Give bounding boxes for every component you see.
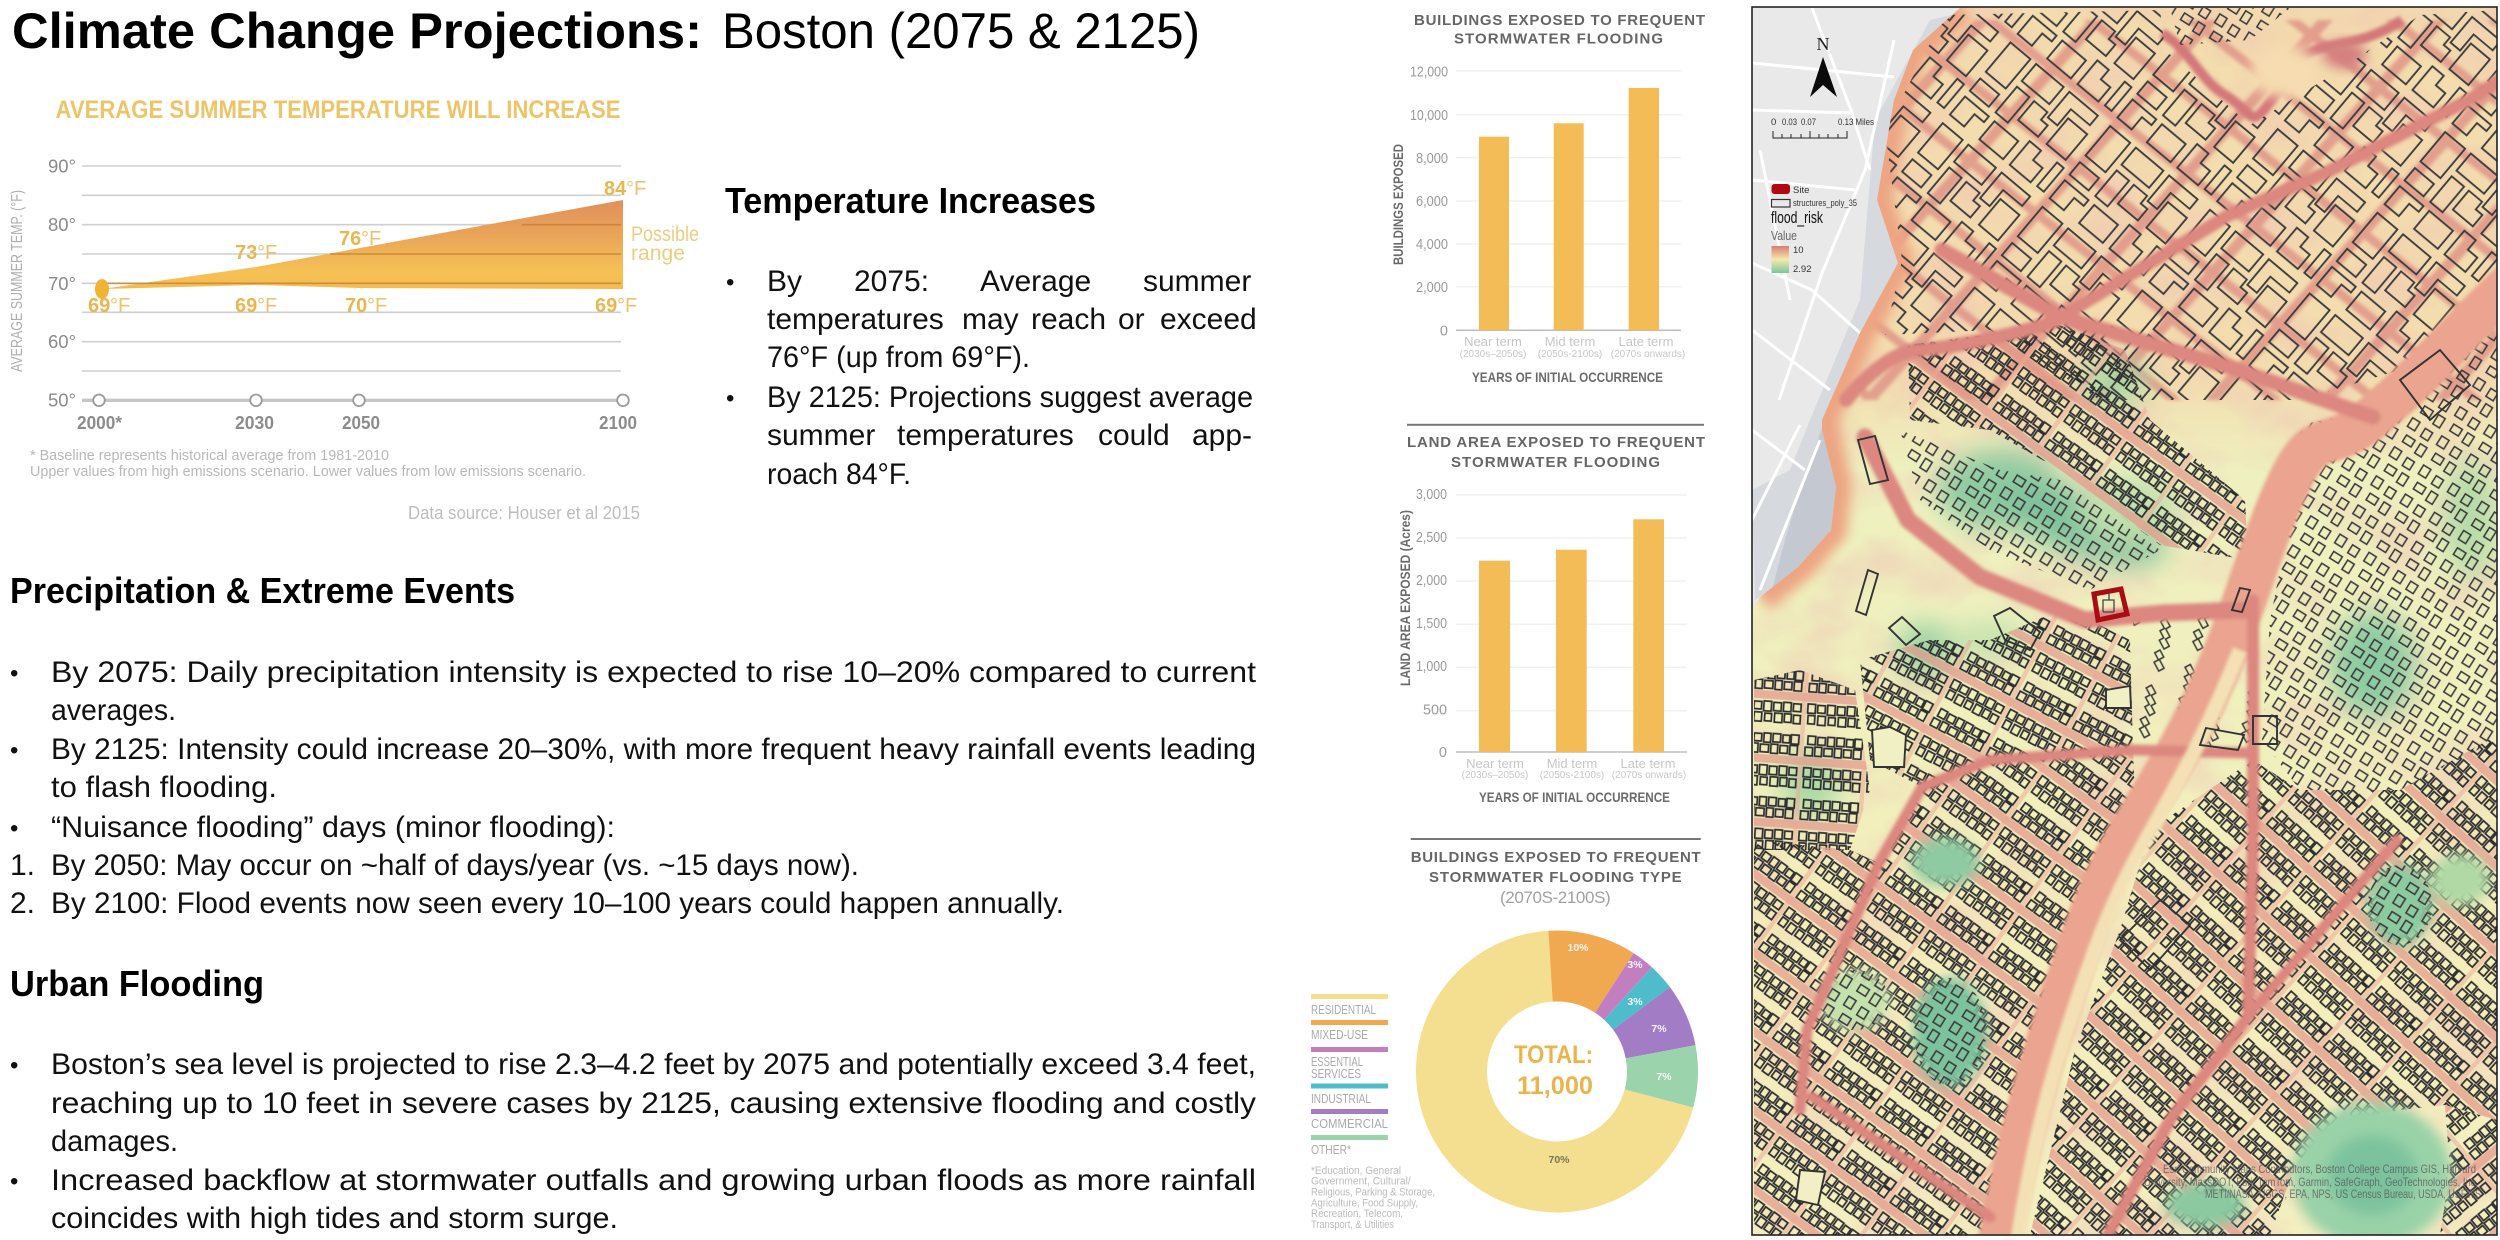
- grid: [1456, 495, 1687, 711]
- green low risk patches: [1782, 360, 2496, 815]
- legend: [1311, 994, 1388, 1157]
- chart title: BUILDINGS EXPOSED TO FREQUENT: [1414, 12, 1705, 29]
- legend footnote: Recreation, Telecom,: [1311, 1208, 1403, 1220]
- grey basemap: [1752, 8, 1960, 608]
- y axis labels: 90°: [48, 156, 76, 176]
- donut centre total: [1514, 1041, 1593, 1100]
- possible range label: range: [631, 242, 685, 265]
- y labels: 0: [1439, 745, 1447, 761]
- legend footnote: Government, Cultural/: [1311, 1176, 1412, 1188]
- bullet list: 76°F (up from 69°F).: [767, 341, 1030, 374]
- value labels: 69: [235, 295, 257, 317]
- legend footnote: [1311, 1165, 1435, 1231]
- legend: RESIDENTIAL: [1311, 1003, 1376, 1017]
- value labels: 69: [595, 295, 617, 317]
- percent labels: 70%: [1548, 1154, 1570, 1166]
- value labels: 76: [339, 228, 361, 250]
- bullet list: •: [726, 269, 734, 296]
- scale bar: 0.03: [1782, 117, 1797, 128]
- chart heading: AVERAGE SUMMER TEMPERATURE WILL INCREASE: [56, 96, 620, 124]
- bar chart: land area exposed: [1397, 424, 1705, 805]
- houses, east: [2262, 330, 2497, 790]
- axis line: [1456, 329, 1681, 331]
- dense houses south east: [2030, 735, 2497, 1235]
- range grid overlays: [102, 225, 621, 283]
- bullet list: damages.: [51, 1125, 178, 1158]
- section: temperature increases: [725, 180, 1257, 491]
- x labels: (2050s-2100s): [1538, 349, 1602, 360]
- legend footnote: Transport, & Utilities: [1311, 1219, 1394, 1231]
- x labels: (2070s onwards): [1611, 349, 1685, 360]
- y labels: 2,000: [1416, 573, 1447, 589]
- y labels: 8,000: [1416, 151, 1448, 167]
- bullet list: •: [10, 1052, 18, 1079]
- land heat surface: [1752, 7, 2500, 1240]
- footnote: [30, 447, 586, 480]
- legend footnote: Agriculture, Food Supply,: [1311, 1198, 1418, 1210]
- bullet list: exceed: [1160, 303, 1257, 336]
- y axis labels: 80°: [48, 214, 76, 235]
- bullet list: Average: [980, 265, 1091, 298]
- donut centre total: 11,000: [1517, 1072, 1593, 1100]
- grid: [1456, 71, 1681, 287]
- bullet list: •: [726, 385, 734, 412]
- heading: Temperature Increases: [725, 180, 1096, 221]
- value labels: 70: [345, 295, 367, 317]
- bullet list: •: [10, 737, 18, 764]
- upper zone risk streets: [1860, 20, 2497, 400]
- donut centre total: TOTAL:: [1514, 1041, 1593, 1069]
- value labels: °F: [257, 242, 277, 264]
- dense houses, west centre: [1860, 610, 2133, 787]
- legend footnote: Religious, Parking & Storage,: [1311, 1187, 1435, 1199]
- chart title: [1414, 12, 1705, 48]
- title: Boston (2075 & 2125): [722, 3, 1200, 59]
- value labels: °F: [367, 295, 387, 317]
- y labels: 1,500: [1416, 616, 1447, 632]
- map legend: [1771, 184, 1857, 275]
- section: urban flooding: [10, 963, 1256, 1235]
- legend: MIXED-USE: [1311, 1028, 1368, 1042]
- footnote: * Baseline represents historical average from 1981-2010: [30, 447, 389, 464]
- bullet list: 2075:: [854, 265, 929, 298]
- bullet list: temperatures: [897, 419, 1074, 452]
- title: Climate Change Projections:: [12, 3, 702, 59]
- x labels: (2050s-2100s): [1540, 770, 1604, 781]
- x labels: Mid term: [1545, 334, 1595, 349]
- base colour: [1752, 7, 2497, 1235]
- large institutional buildings, north: [1885, 10, 2497, 400]
- bullet list: summer: [767, 419, 875, 452]
- y labels: 2,500: [1416, 530, 1447, 546]
- x labels: [1460, 334, 1685, 360]
- y axis labels: 50°: [48, 390, 76, 410]
- map: flood risk: [1752, 7, 2500, 1240]
- bullet list: to flash flooding.: [51, 771, 277, 804]
- bullet list: may: [962, 303, 1019, 336]
- bullet list: [726, 265, 1257, 491]
- section: precipitation and extreme events: [10, 570, 1257, 920]
- y axis labels: [48, 156, 76, 410]
- building footprints: [1754, 8, 2497, 1235]
- chart title: (2070S-2100S): [1500, 888, 1611, 907]
- y labels: 4,000: [1416, 237, 1448, 253]
- possible range label: [631, 223, 699, 265]
- chart title: STORMWATER FLOODING: [1451, 454, 1660, 471]
- chart title: STORMWATER FLOODING TYPE: [1429, 869, 1682, 886]
- y axis title: LAND AREA EXPOSED (Acres): [1397, 510, 1413, 686]
- bars: [1479, 88, 1659, 330]
- map legend: flood_risk: [1771, 208, 1823, 227]
- mottled risk texture: [1752, 7, 2497, 1235]
- year labels: [77, 413, 637, 433]
- y labels: 3,000: [1416, 487, 1447, 503]
- y labels: [1410, 64, 1448, 340]
- x labels: Late term: [1621, 756, 1675, 771]
- bullet list: summer: [1143, 265, 1251, 298]
- y labels: 10,000: [1410, 108, 1448, 124]
- bullet list: averages.: [51, 694, 176, 727]
- percent labels: 7%: [1656, 1071, 1672, 1083]
- chart title: LAND AREA EXPOSED TO FREQUENT: [1407, 434, 1705, 451]
- map legend: structures_poly_35: [1793, 198, 1857, 209]
- legend: INDUSTRIAL: [1311, 1092, 1371, 1106]
- year labels: 2030: [235, 413, 274, 433]
- sparse long houses, centre: [2133, 612, 2250, 750]
- bullet list: Boston’s sea level is projected to rise 2.3–4.2 feet by 2075 and potentially exceed 3.4 feet,: [51, 1048, 1256, 1081]
- pale median in main strip: [2018, 650, 2240, 1240]
- grid lines: [82, 166, 621, 371]
- bullet list: •: [10, 815, 18, 842]
- percent labels: 3%: [1627, 996, 1643, 1008]
- y labels: 6,000: [1416, 194, 1448, 210]
- bullet list: •: [10, 660, 18, 687]
- chart title: [1407, 434, 1705, 471]
- individual large buildings: [1796, 350, 2470, 1205]
- bullet list: could: [1098, 419, 1170, 452]
- x labels: (2070s onwards): [1612, 770, 1686, 781]
- map legend: 2.92: [1793, 264, 1812, 275]
- legend: COMMERCIAL: [1311, 1117, 1388, 1131]
- hill contours at top: [2162, 20, 2402, 117]
- y labels: 2,000: [1416, 280, 1448, 296]
- bullet list: “Nuisance flooding” days (minor flooding):: [51, 811, 615, 844]
- scale bar: [1771, 117, 1874, 138]
- percent labels: 10%: [1567, 942, 1589, 954]
- value labels: [88, 178, 646, 317]
- y labels: 500: [1423, 702, 1447, 718]
- y axis labels: 60°: [48, 331, 76, 352]
- blocks, far west: [1754, 670, 1870, 850]
- possible range label: Possible: [631, 223, 699, 246]
- percent labels: 7%: [1651, 1023, 1667, 1035]
- bullet list: By 2050: May occur on ~half of days/year (vs. ~15 days now).: [51, 849, 859, 882]
- value labels: °F: [110, 295, 130, 317]
- y axis title: BUILDINGS EXPOSED: [1390, 144, 1406, 265]
- bullet list: [10, 1048, 1256, 1235]
- y axis labels: 70°: [48, 273, 76, 294]
- legend footnote: *Education, General: [1311, 1165, 1401, 1177]
- legend: ESSENTIAL: [1311, 1055, 1363, 1069]
- main red roads: [1800, 80, 2500, 1240]
- map attribution: [2144, 1164, 2480, 1200]
- bullet list: reaching up to 10 feet in severe cases by 2125, causing extensive flooding and costly: [51, 1087, 1256, 1120]
- top rule: [1411, 838, 1701, 840]
- bullet list: app-: [1192, 419, 1252, 452]
- bar chart: buildings exposed: [1390, 12, 1705, 385]
- x labels: Late term: [1619, 334, 1673, 349]
- baseline dot: [95, 279, 109, 299]
- x axis title: YEARS OF INITIAL OCCURRENCE: [1472, 369, 1663, 385]
- top rule: [1407, 424, 1704, 426]
- value labels: 73: [235, 242, 257, 264]
- value labels: °F: [361, 228, 381, 250]
- bullet list: coincides with high tides and storm surge.: [51, 1202, 618, 1235]
- map legend: 10: [1793, 245, 1804, 256]
- bullet list: •: [10, 1168, 18, 1195]
- year labels: 2050: [342, 413, 380, 433]
- bullet list: 1.: [10, 849, 35, 882]
- map legend: Value: [1771, 228, 1797, 243]
- donut segments: [1416, 931, 1698, 1213]
- value labels: 84: [604, 178, 627, 200]
- axis line: [1456, 751, 1687, 753]
- x labels: (2030s–2050s): [1462, 770, 1528, 781]
- chart: average summer temperature: [9, 96, 699, 523]
- bullet list: By 2125: Intensity could increase 20–30%, with more frequent heavy rainfall events leading: [51, 733, 1256, 766]
- x labels: Near term: [1466, 756, 1524, 771]
- bullet list: temperatures: [767, 303, 944, 336]
- bullet list: 2.: [10, 887, 35, 920]
- legend: SERVICES: [1311, 1067, 1361, 1081]
- time axis: [82, 394, 629, 406]
- dense houses, central north: [1908, 325, 2248, 560]
- bullet list: By: [767, 265, 802, 298]
- legend: OTHER*: [1311, 1143, 1351, 1157]
- footnote: Upper values from high emissions scenario. Lower values from low emissions scenario.: [30, 463, 586, 480]
- bullet list: By 2125: Projections suggest average: [767, 381, 1253, 414]
- y labels: [1416, 487, 1447, 761]
- north arrow: [1810, 34, 1837, 97]
- bullet list: By 2075: Daily precipitation intensity is expected to rise 10–20% compared to current: [51, 656, 1257, 689]
- data source: Data source: Houser et al 2015: [408, 503, 640, 523]
- map legend: Site: [1793, 185, 1809, 196]
- dense houses south west: [1754, 750, 2135, 1235]
- value labels: °F: [257, 295, 277, 317]
- map frame: [1752, 7, 2497, 1235]
- x labels: (2030s–2050s): [1460, 349, 1526, 360]
- value labels: °F: [626, 178, 646, 200]
- bullet list: or: [1118, 303, 1145, 336]
- x axis title: YEARS OF INITIAL OCCURRENCE: [1479, 789, 1670, 805]
- value labels: °F: [617, 295, 637, 317]
- bars: [1479, 519, 1664, 752]
- bullet list: roach 84°F.: [767, 458, 911, 491]
- chart title: BUILDINGS EXPOSED TO FREQUENT: [1411, 849, 1701, 866]
- houses south east corner: [2440, 1105, 2497, 1235]
- y labels: 0: [1440, 324, 1448, 340]
- value labels: 69: [88, 295, 110, 317]
- houses on upper ridge: [2170, 8, 2290, 45]
- year labels: 2000*: [77, 413, 122, 433]
- projected range area: [102, 200, 623, 289]
- x labels: Near term: [1464, 334, 1522, 349]
- site marker: [2094, 589, 2127, 620]
- y labels: 1,000: [1416, 659, 1447, 675]
- y axis title: AVERAGE SUMMER TEMP. (°F): [9, 190, 26, 372]
- x labels: Mid term: [1547, 756, 1597, 771]
- parks over the housing: [1821, 838, 2490, 1240]
- scale bar: 0.13 Miles: [1838, 117, 1874, 128]
- chart title: [1411, 849, 1701, 907]
- percent labels: 3%: [1627, 959, 1643, 971]
- scale bar: 0.07: [1801, 117, 1816, 128]
- bullet list: reach: [1031, 303, 1106, 336]
- coast edge band: [1760, 7, 1961, 597]
- donut chart: buildings by type: [1311, 838, 1701, 1231]
- title: [12, 3, 1200, 59]
- bullet list: Increased backflow at stormwater outfalls and growing urban floods as more rainfall: [51, 1164, 1256, 1197]
- y labels: 12,000: [1410, 64, 1448, 80]
- bullet list: By 2100: Flood events now seen every 10–100 years could happen annually.: [51, 887, 1064, 920]
- heading: Urban Flooding: [10, 963, 264, 1004]
- bullet list: [10, 656, 1257, 920]
- heading: Precipitation & Extreme Events: [10, 570, 515, 611]
- scale bar: 0: [1771, 117, 1776, 128]
- percent labels: [1548, 942, 1672, 1166]
- north arrow: N: [1816, 34, 1830, 54]
- x labels: [1462, 756, 1686, 781]
- chart title: STORMWATER FLOODING: [1454, 30, 1663, 48]
- year labels: 2100: [599, 413, 637, 433]
- houses by the green: [1900, 430, 2160, 590]
